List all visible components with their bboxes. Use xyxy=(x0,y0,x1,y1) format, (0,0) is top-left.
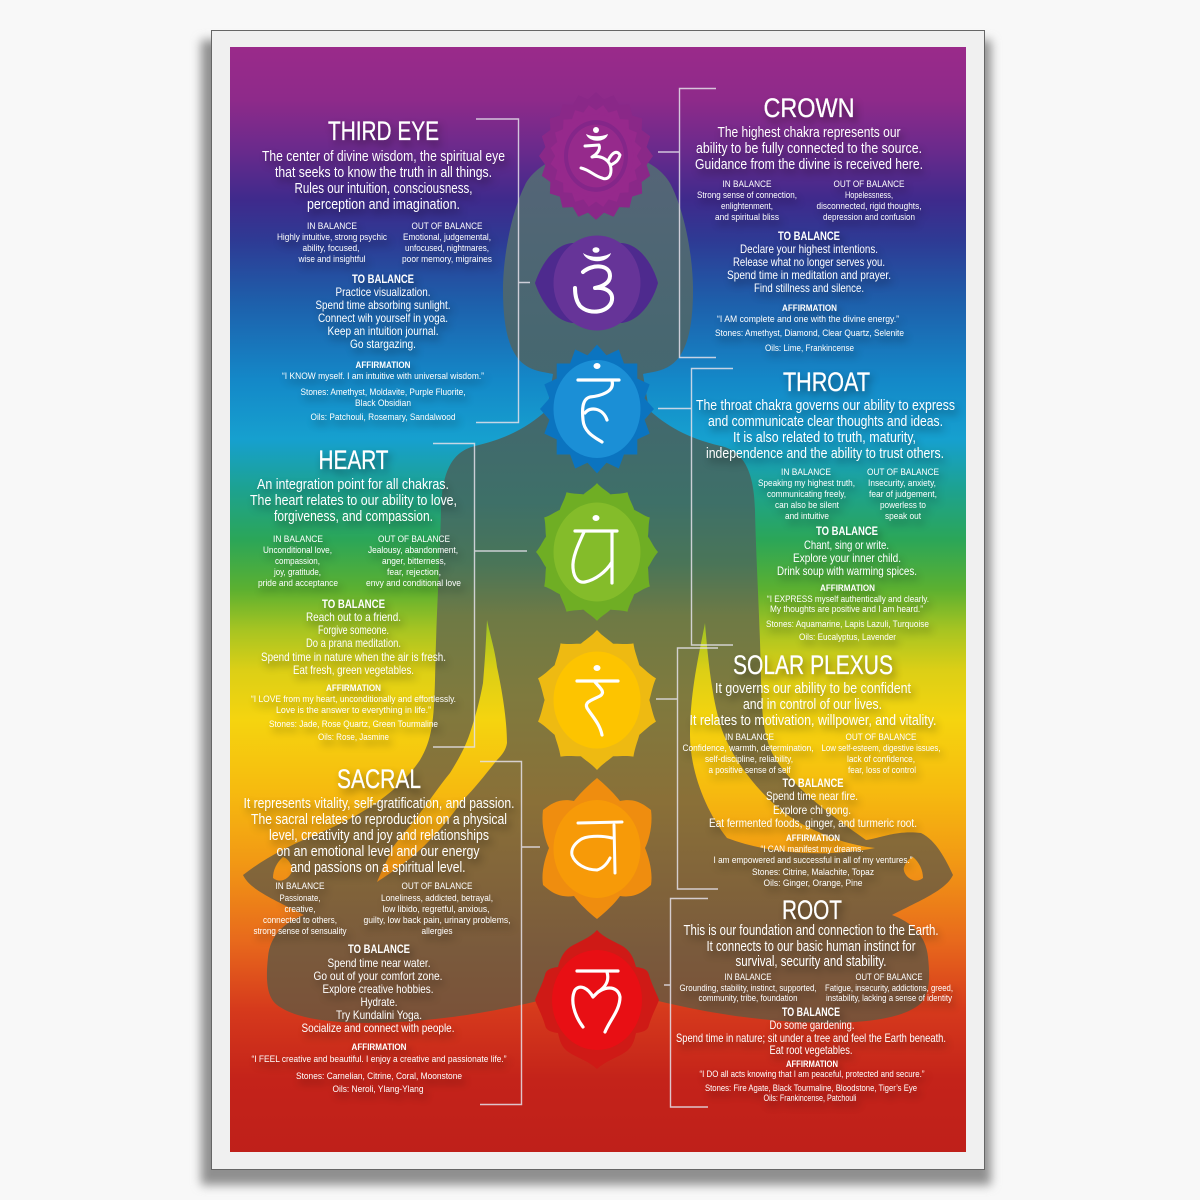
section: throat xyxy=(696,367,955,643)
in balance: solar plexus: IN BALANCE xyxy=(725,732,774,743)
description: sacral: on an emotional level and our energy xyxy=(276,844,480,860)
out of balance: crown xyxy=(816,179,922,223)
to balance: sacral: Explore creative hobbies. xyxy=(322,982,434,996)
to balance: crown: TO BALANCE xyxy=(778,231,840,243)
to balance: throat: Chant, sing or write. xyxy=(804,538,889,552)
in balance: solar plexus: Confidence, warmth, determination, xyxy=(682,743,814,754)
description: heart: The heart relates to our ability to love, xyxy=(250,493,457,509)
in balance: root xyxy=(680,972,816,1004)
bracket: third eye xyxy=(476,119,530,422)
to balance: throat: Drink soup with warming spices. xyxy=(777,564,917,578)
affirmation: root xyxy=(700,1059,924,1104)
description: solar plexus: It governs our ability to be confident xyxy=(715,681,911,697)
chakra: solar plexus xyxy=(530,626,664,774)
in balance: sacral xyxy=(254,881,347,937)
out of balance: root xyxy=(825,972,953,1004)
chakra: crown xyxy=(539,92,653,220)
in balance: sacral: creative, xyxy=(284,904,316,915)
affirmation: throat: Stones: Aquamarine, Lapis Lazuli, Turquoise xyxy=(766,619,929,630)
out of balance: root: Fatigue, insecurity, addictions, greed, xyxy=(825,983,953,994)
in balance: third eye: Highly intuitive, strong psychic xyxy=(277,232,387,243)
to balance: heart: Do a prana meditation. xyxy=(306,636,401,650)
to balance: sacral: Hydrate. xyxy=(360,995,398,1009)
affirmation: heart: Oils: Rose, Jasmine xyxy=(318,732,389,743)
out of balance: third eye: unfocused, nightmares, xyxy=(405,243,489,254)
in balance: crown: Strong sense of connection, xyxy=(697,190,797,201)
affirmation: solar plexus: AFFIRMATION xyxy=(786,833,840,844)
to balance: heart xyxy=(261,599,446,677)
to balance: root: Spend time in nature; sit under a tree and feel the Earth beneath. xyxy=(676,1031,946,1045)
affirmation: crown: Stones: Amethyst, Diamond, Clear Quartz, Selenite xyxy=(715,328,904,339)
in balance: sacral: Passionate, xyxy=(280,893,320,904)
in balance: throat: Speaking my highest truth, xyxy=(758,478,855,489)
out of balance: solar plexus xyxy=(822,732,940,776)
out of balance: solar plexus: lack of confidence, xyxy=(847,754,915,765)
to balance: root: Eat root vegetables. xyxy=(770,1043,852,1057)
affirmation: third eye: Black Obsidian xyxy=(355,398,411,409)
description: solar plexus: It relates to motivation, willpower, and vitality. xyxy=(690,713,936,729)
description: heart: forgiveness, and compassion. xyxy=(274,509,433,525)
affirmation: root: Stones: Fire Agate, Black Tourmaline, Bloodstone, Tiger’s Eye xyxy=(705,1083,917,1094)
to balance: root xyxy=(676,1007,946,1057)
description: third eye: perception and imagination. xyxy=(307,197,460,213)
out of balance: sacral: guilty, low back pain, urinary problems, xyxy=(364,915,510,926)
to balance: third eye xyxy=(316,274,450,351)
in balance: sacral: connected to others, xyxy=(263,915,337,926)
description: heart: An integration point for all chakras. xyxy=(257,477,449,493)
in balance: third eye xyxy=(277,221,387,265)
affirmation: third eye: AFFIRMATION xyxy=(356,360,411,371)
in balance: throat xyxy=(758,467,855,522)
to balance: third eye: Connect wih yourself in yoga. xyxy=(318,311,448,325)
out of balance: throat: Insecurity, anxiety, xyxy=(868,478,936,489)
chakra: root xyxy=(535,930,659,1069)
description: third eye: Rules our intuition, consciousness, xyxy=(294,181,472,197)
out of balance: solar plexus: Low self-esteem, digestive issues, xyxy=(822,743,940,754)
affirmation: solar plexus: Oils: Ginger, Orange, Pine xyxy=(764,878,862,889)
bracket: throat xyxy=(658,368,733,645)
out of balance: heart: Jealousy, abandonment, xyxy=(368,545,458,556)
title: root: ROOT xyxy=(782,895,842,925)
to balance: solar plexus: Eat fermented foods, ginger, and turmeric root. xyxy=(709,816,917,830)
affirmation: throat xyxy=(766,583,929,643)
poster drop shadow xyxy=(201,40,991,1185)
out of balance: throat: speak out xyxy=(885,511,921,522)
affirmation: crown xyxy=(715,303,904,354)
bracket: sacral xyxy=(480,762,540,1104)
out of balance: third eye: Emotional, judgemental, xyxy=(403,232,491,243)
description: sacral xyxy=(244,796,514,876)
affirmation: third eye xyxy=(282,360,484,423)
in balance: throat: IN BALANCE xyxy=(781,467,831,478)
description: root: It connects to our basic human instinct for xyxy=(706,939,916,955)
poster sheet xyxy=(212,30,984,1170)
meditating body silhouette xyxy=(243,150,953,1023)
affirmation: root: AFFIRMATION xyxy=(786,1059,838,1070)
affirmation: heart: AFFIRMATION xyxy=(326,683,381,694)
to balance: crown xyxy=(727,231,891,295)
title: sacral: SACRAL xyxy=(337,764,421,794)
in balance: heart xyxy=(258,534,338,589)
affirmation: throat: My thoughts are positive and I am heard.” xyxy=(770,604,923,615)
to balance: third eye: TO BALANCE xyxy=(352,274,414,286)
in balance: sacral: strong sense of sensuality xyxy=(254,926,347,937)
section: solar plexus xyxy=(682,650,940,889)
out of balance: crown: depression and confusion xyxy=(823,212,915,223)
out of balance: crown: OUT OF BALANCE xyxy=(834,179,904,190)
to balance: third eye: Practice visualization. xyxy=(336,285,430,299)
description: throat: It is also related to truth, maturity, xyxy=(733,430,916,446)
description: sacral: level, creativity and joy and relationships xyxy=(269,828,489,844)
affirmation: heart: Love is the answer to everything in life.” xyxy=(276,705,431,716)
in balance: heart: pride and acceptance xyxy=(258,578,338,589)
to balance: throat: Explore your inner child. xyxy=(793,551,901,565)
out of balance: heart: fear, rejection, xyxy=(387,567,441,578)
description: sacral: The sacral relates to reproduction on a physical xyxy=(251,812,507,828)
affirmation: crown: AFFIRMATION xyxy=(782,303,837,314)
in balance: root: IN BALANCE xyxy=(724,972,772,983)
chakra: sacral xyxy=(542,778,652,919)
chakra: third eye xyxy=(535,236,658,330)
title: third eye: THIRD EYE xyxy=(328,116,439,146)
in balance: sacral: IN BALANCE xyxy=(276,881,324,892)
out of balance: third eye xyxy=(402,221,492,265)
section: sacral xyxy=(244,764,514,1095)
out of balance: sacral: OUT OF BALANCE xyxy=(402,881,472,892)
to balance: heart: Forgive someone. xyxy=(318,623,389,637)
affirmation: throat: AFFIRMATION xyxy=(820,583,875,594)
to balance: crown: Spend time in meditation and prayer. xyxy=(727,268,891,282)
affirmation: third eye: Oils: Patchouli, Rosemary, Sandalwood xyxy=(310,412,456,423)
in balance: throat: communicating freely, xyxy=(767,489,846,500)
to balance: crown: Declare your highest intentions. xyxy=(740,242,878,256)
in balance: heart: Unconditional love, xyxy=(263,545,332,556)
to balance: solar plexus: TO BALANCE xyxy=(782,778,844,790)
in balance: heart: compassion, xyxy=(275,556,320,567)
in balance: crown: IN BALANCE xyxy=(722,179,772,190)
out of balance: throat: OUT OF BALANCE xyxy=(867,467,939,478)
description: crown xyxy=(695,125,923,173)
section: third eye xyxy=(262,116,505,423)
out of balance: heart: OUT OF BALANCE xyxy=(378,534,450,545)
rainbow gradient panel xyxy=(230,47,966,1152)
in balance: crown xyxy=(697,179,797,223)
out of balance: crown: disconnected, rigid thoughts, xyxy=(816,201,922,212)
description: sacral: It represents vitality, self-gratification, and passion. xyxy=(244,796,514,812)
in balance: heart: IN BALANCE xyxy=(273,534,323,545)
bracket: solar plexus xyxy=(656,648,718,889)
description: throat: and communicate clear thoughts and ideas. xyxy=(708,414,943,430)
affirmation: sacral: Oils: Neroli, Ylang-Ylang xyxy=(332,1084,424,1095)
affirmation: crown: Oils: Lime, Frankincense xyxy=(765,343,854,354)
to balance: sacral xyxy=(302,944,454,1035)
to balance: crown: Release what no longer serves you. xyxy=(733,255,885,269)
out of balance: heart: anger, bitterness, xyxy=(382,556,446,567)
out of balance: heart: envy and conditional love xyxy=(366,578,461,589)
in balance: crown: and spiritual bliss xyxy=(715,212,779,223)
affirmation: root: “I DO all acts knowing that I am peaceful, protected and secure.” xyxy=(700,1069,924,1080)
in balance: third eye: wise and insightful xyxy=(298,254,366,265)
description: root: This is our foundation and connection to the Earth. xyxy=(684,923,938,939)
in balance: crown: enlightenment, xyxy=(721,201,773,212)
chakra: heart xyxy=(534,481,660,623)
to balance: solar plexus: Explore chi gong. xyxy=(773,803,851,817)
description: crown: Guidance from the divine is received here. xyxy=(695,157,923,173)
description: root xyxy=(684,923,938,970)
section: crown xyxy=(695,93,923,354)
out of balance: solar plexus: OUT OF BALANCE xyxy=(846,732,916,743)
affirmation: sacral: “I FEEL creative and beautiful. I enjoy a creative and passionate life.” xyxy=(252,1054,506,1065)
to balance: heart: Eat fresh, green vegetables. xyxy=(293,663,414,677)
to balance: root: TO BALANCE xyxy=(782,1007,840,1019)
affirmation: root: Oils: Frankincense, Patchouli xyxy=(764,1093,856,1104)
out of balance: sacral: allergies xyxy=(422,926,453,937)
bracket: heart xyxy=(433,444,527,747)
out of balance: sacral: Loneliness, addicted, betrayal, xyxy=(381,893,493,904)
description: root: survival, security and stability. xyxy=(736,954,886,970)
to balance: throat: TO BALANCE xyxy=(816,526,878,538)
affirmation: solar plexus: “I CAN manifest my dreams. xyxy=(760,844,864,855)
to balance: solar plexus xyxy=(709,778,917,830)
description: solar plexus: and in control of our lives. xyxy=(743,697,882,713)
description: throat: independence and the ability to trust others. xyxy=(706,446,944,462)
out of balance: heart xyxy=(366,534,461,589)
in balance: root: Grounding, stability, instinct, supported, xyxy=(680,983,816,994)
chakra: throat xyxy=(539,344,655,474)
to balance: third eye: Go stargazing. xyxy=(350,337,416,351)
description: solar plexus xyxy=(690,681,936,729)
section: heart xyxy=(250,445,461,743)
out of balance: third eye: OUT OF BALANCE xyxy=(412,221,482,232)
in balance: heart: joy, gratitude, xyxy=(273,567,321,578)
out of balance: root: instability, lacking a sense of identity xyxy=(826,993,952,1004)
in balance: root: community, tribe, foundation xyxy=(698,993,798,1004)
to balance: heart: Spend time in nature when the air is fresh. xyxy=(261,650,446,664)
to balance: throat xyxy=(777,526,917,578)
affirmation: throat: “I EXPRESS myself authentically and clearly. xyxy=(767,594,929,605)
section: root xyxy=(676,895,953,1104)
out of balance: sacral: low libido, regretful, anxious, xyxy=(382,904,490,915)
in balance: throat: can also be silent xyxy=(775,500,839,511)
to balance: third eye: Keep an intuition journal. xyxy=(328,324,438,338)
bracket: root xyxy=(664,898,708,1107)
description: throat xyxy=(696,398,955,462)
in balance: throat: and intuitive xyxy=(785,511,829,522)
in balance: third eye: ability, focused, xyxy=(302,243,360,254)
affirmation: solar plexus: Stones: Citrine, Malachite, Topaz xyxy=(752,867,874,878)
out of balance: throat: fear of judgement, xyxy=(869,489,937,500)
description: sacral: and passions on a spiritual level. xyxy=(290,860,466,876)
affirmation: solar plexus xyxy=(714,833,912,889)
title: solar plexus: SOLAR PLEXUS xyxy=(733,650,893,680)
out of balance: throat: powerless to xyxy=(880,500,926,511)
description: crown: ability to be fully connected to the source. xyxy=(696,141,922,157)
title: throat: THROAT xyxy=(783,367,870,397)
in balance: solar plexus xyxy=(682,732,814,776)
affirmation: crown: “I AM complete and one with the divine energy.” xyxy=(717,314,899,325)
affirmation: sacral: AFFIRMATION xyxy=(352,1042,407,1053)
description: third eye: that seeks to know the truth in all things. xyxy=(275,165,492,181)
out of balance: third eye: poor memory, migraines xyxy=(402,254,492,265)
affirmation: sacral: Stones: Carnelian, Citrine, Coral, Moonstone xyxy=(296,1071,462,1082)
to balance: sacral: Go out of your comfort zone. xyxy=(314,969,442,983)
to balance: sacral: TO BALANCE xyxy=(348,944,410,956)
affirmation: heart xyxy=(251,683,456,743)
out of balance: sacral xyxy=(364,881,510,937)
out of balance: solar plexus: fear, loss of control xyxy=(848,765,916,776)
description: third eye: The center of divine wisdom, the spiritual eye xyxy=(262,149,505,165)
to balance: sacral: Spend time near water. xyxy=(328,956,430,970)
in balance: solar plexus: self-discipline, reliability, xyxy=(705,754,793,765)
description: crown: The highest chakra represents our xyxy=(718,125,901,141)
bracket: crown xyxy=(658,88,716,358)
to balance: heart: Reach out to a friend. xyxy=(306,610,401,624)
out of balance: crown: Hopelessness, xyxy=(845,190,893,201)
affirmation: heart: “I LOVE from my heart, unconditionally and effortlessly. xyxy=(251,694,456,705)
in balance: solar plexus: a positive sense of self xyxy=(708,765,791,776)
to balance: sacral: Socialize and connect with people. xyxy=(302,1021,454,1035)
title: heart: HEART xyxy=(318,445,388,475)
out of balance: root: OUT OF BALANCE xyxy=(856,972,922,983)
to balance: sacral: Try Kundalini Yoga. xyxy=(336,1008,422,1022)
to balance: root: Do some gardening. xyxy=(770,1018,854,1032)
description: heart xyxy=(250,477,457,525)
affirmation: third eye: “I KNOW myself. I am intuitive with universal wisdom.” xyxy=(282,371,484,382)
to balance: heart: TO BALANCE xyxy=(322,599,385,611)
affirmation: sacral xyxy=(252,1042,506,1095)
out of balance: throat xyxy=(867,467,939,522)
to balance: solar plexus: Spend time near fire. xyxy=(766,789,858,803)
to balance: crown: Find stillness and silence. xyxy=(754,281,864,295)
title: crown: CROWN xyxy=(764,93,854,123)
affirmation: solar plexus: I am empowered and successful in all of my ventures.” xyxy=(714,855,912,866)
description: throat: The throat chakra governs our ability to express xyxy=(696,398,955,414)
affirmation: throat: Oils: Eucalyptus, Lavender xyxy=(799,632,896,643)
in balance: third eye: IN BALANCE xyxy=(307,221,357,232)
to balance: third eye: Spend time absorbing sunlight. xyxy=(316,298,450,312)
affirmation: heart: Stones: Jade, Rose Quartz, Green Tourmaline xyxy=(269,719,438,730)
affirmation: third eye: Stones: Amethyst, Moldavite, Purple Fluorite, xyxy=(300,387,466,398)
description: third eye xyxy=(262,149,505,213)
